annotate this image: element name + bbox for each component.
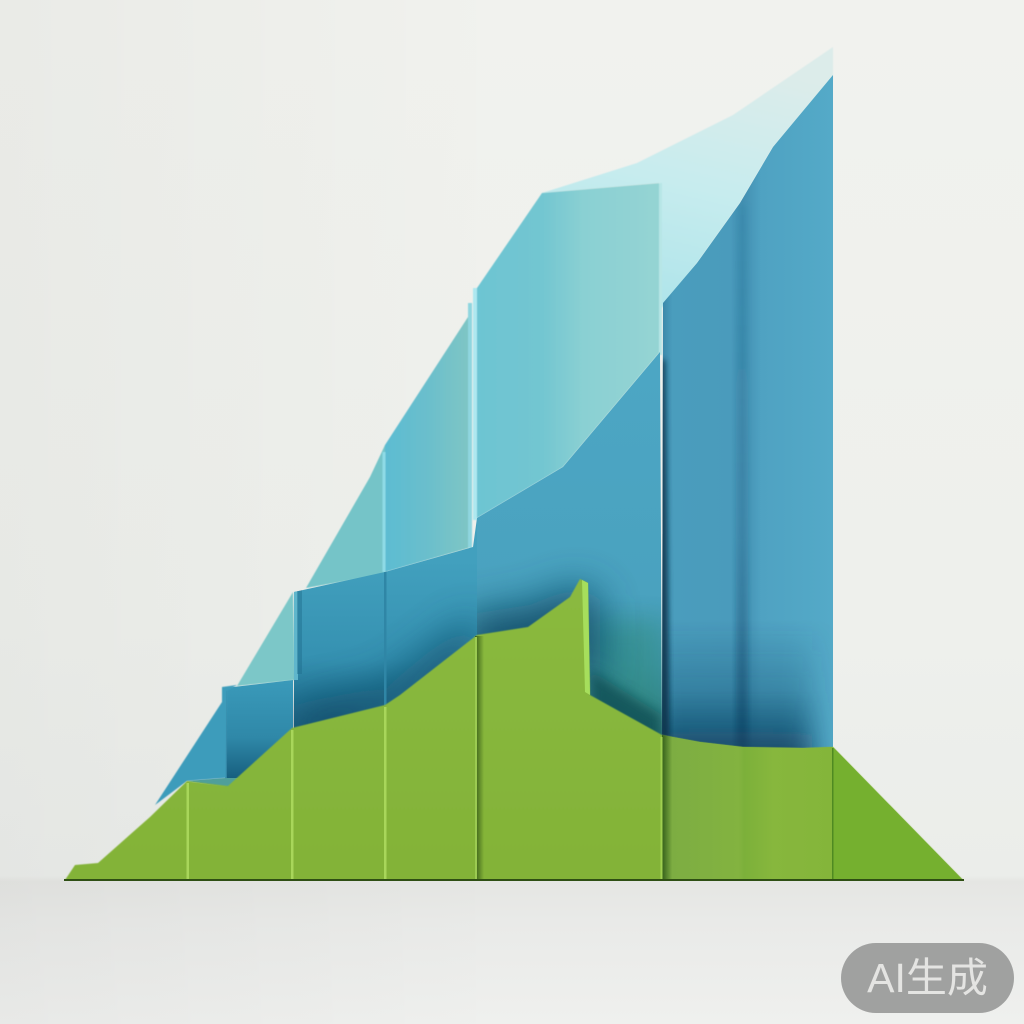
spike light side (582, 580, 590, 695)
teal panel: middle (385, 317, 472, 572)
baseline (64, 879, 964, 881)
fold shadow (736, 205, 748, 755)
blue lower panels (293, 518, 477, 728)
base shadow (650, 620, 812, 750)
teal translucent layer (237, 183, 662, 686)
right triangle (833, 747, 963, 880)
green silhouette (65, 579, 963, 880)
shadow right of spike (590, 669, 662, 735)
right shaded panel (662, 735, 833, 880)
green reflection (594, 613, 662, 710)
AI generated badge (841, 943, 1014, 1013)
blue left wedge (155, 685, 237, 805)
shadow above green (465, 585, 600, 680)
teal panel: tall centre (477, 183, 660, 518)
blue small step panel (225, 680, 293, 778)
left edge shadow (662, 356, 673, 736)
shadow above green (293, 608, 477, 728)
blue right panel (650, 70, 834, 760)
panel seams (186, 637, 834, 880)
teal panel: lower (306, 445, 385, 588)
teal panel: lowest triangle (237, 592, 295, 686)
dark shadow at centre seam (475, 636, 484, 880)
blue centre panel (477, 352, 662, 736)
green ground layer (64, 579, 964, 881)
light panel edge highlights (382, 183, 662, 572)
small light ledge (187, 778, 242, 787)
AI generated badge: AI生成 (867, 955, 988, 1001)
back pale layer (542, 47, 833, 310)
